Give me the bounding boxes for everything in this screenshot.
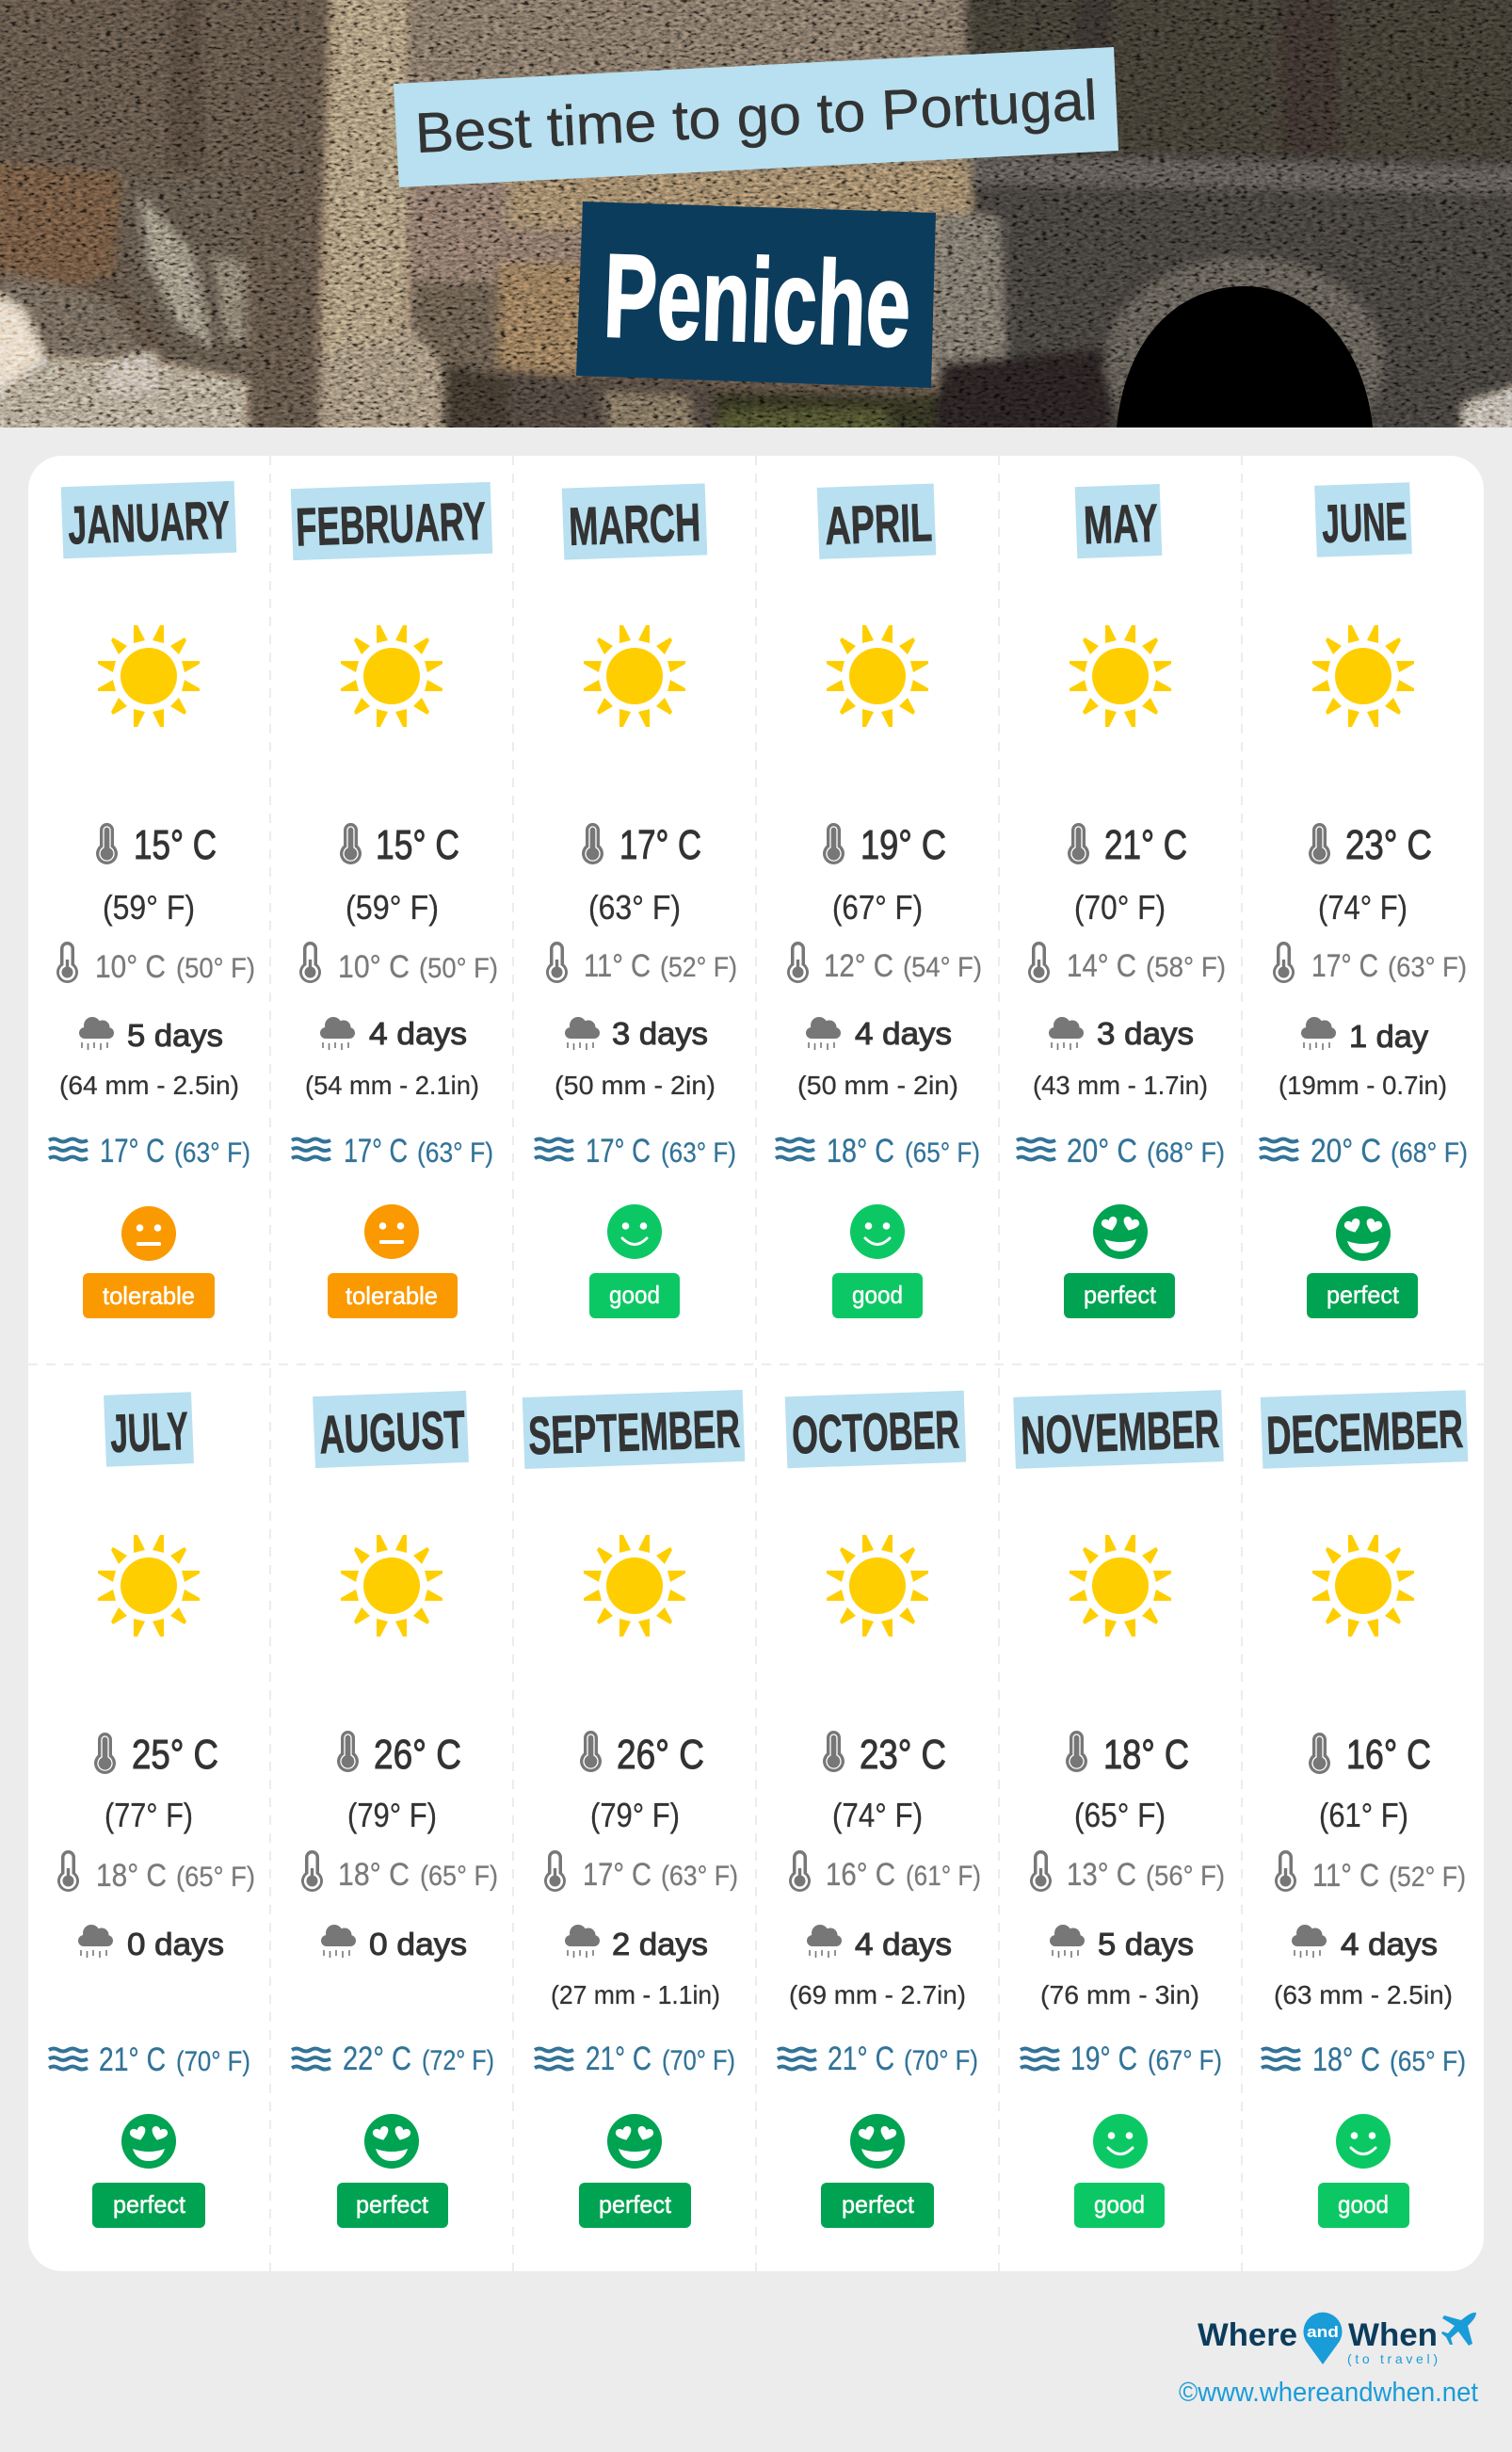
icon: thermometer high <box>580 1731 602 1772</box>
low temperature F: (50° F) <box>176 953 255 984</box>
icon: heart-eyes face <box>607 2114 662 2169</box>
icon: thermometer high <box>96 823 118 864</box>
icon: sea waves <box>1021 2049 1059 2070</box>
month label: MARCH <box>568 492 701 557</box>
sea temperature C: 21° C <box>99 2041 166 2078</box>
month label <box>291 482 492 560</box>
icon: smiling face <box>1093 2114 1148 2169</box>
sea temperature F: (72° F) <box>422 2045 494 2076</box>
rainfall: (27 mm - 1.1in) <box>551 1980 720 2009</box>
rainy days: 5 days <box>1098 1927 1194 1961</box>
icon: sea waves <box>535 1139 573 1160</box>
rainy days: 3 days <box>1097 1016 1194 1051</box>
month label <box>562 483 707 560</box>
rating badge <box>579 2183 691 2228</box>
rainy days: 1 day <box>1349 1019 1429 1054</box>
rating badge: perfect <box>1327 1281 1400 1309</box>
low temperature C: 18° C <box>96 1858 167 1894</box>
icon: thermometer high <box>1066 1731 1087 1772</box>
icon: map pin with and <box>1303 2313 1343 2364</box>
high temperature F: (65° F) <box>1074 1796 1166 1834</box>
column: June <box>1260 482 1468 1318</box>
month label: MAY <box>1083 493 1159 556</box>
month label: JUNE <box>1321 492 1407 555</box>
low temperature C: 18° C <box>338 1857 410 1893</box>
sea temperature F: (65° F) <box>1390 2046 1466 2077</box>
low temperature F: (52° F) <box>1389 1862 1466 1893</box>
icon: sea waves <box>1017 1139 1055 1160</box>
sea temperature F: (70° F) <box>662 2045 735 2076</box>
icon: heart-eyes face <box>364 2114 419 2169</box>
month label: FEBRUARY <box>295 492 487 558</box>
rainfall: (63 mm - 2.5in) <box>1274 1980 1453 2009</box>
sea temperature F: (70° F) <box>904 2045 978 2076</box>
icon: airplane <box>1441 2313 1476 2346</box>
icon: thermometer high <box>823 1731 844 1772</box>
rating badge: tolerable <box>346 1282 438 1310</box>
icon: map pin with and: and <box>1307 2323 1339 2341</box>
low temperature F: (52° F) <box>660 952 737 983</box>
month label: JULY <box>109 1401 189 1464</box>
high temperature F: (67° F) <box>832 888 923 927</box>
rainy days: 0 days <box>369 1927 467 1961</box>
icon: sun <box>584 1535 685 1637</box>
icon: sun <box>341 625 442 727</box>
icon: sea waves <box>292 2049 330 2070</box>
high temperature C: 17° C <box>619 822 701 868</box>
icon: thermometer high <box>1309 823 1330 864</box>
rating badge <box>328 1273 458 1318</box>
month label <box>1075 484 1162 558</box>
sea temperature F: (63° F) <box>661 1137 736 1169</box>
icon: thermometer low <box>301 1850 323 1892</box>
low temperature C: 13° C <box>1067 1857 1136 1893</box>
month label: AUGUST <box>318 1399 466 1465</box>
low temperature C: 11° C <box>584 948 651 984</box>
icon: rain cloud <box>1050 1925 1085 1958</box>
low temperature C: 17° C <box>583 1857 651 1893</box>
icon: thermometer low <box>56 942 78 983</box>
rainy days: 4 days <box>1341 1927 1438 1961</box>
sea temperature C: 20° C <box>1067 1133 1137 1170</box>
low temperature C: 16° C <box>826 1857 895 1893</box>
icon: thermometer low <box>787 942 809 983</box>
icon: sun <box>827 625 928 727</box>
icon: thermometer low <box>1028 942 1050 983</box>
month label <box>61 481 236 558</box>
high temperature C: 21° C <box>1104 822 1187 868</box>
low temperature F: (54° F) <box>903 952 982 983</box>
rating badge <box>1074 2183 1165 2228</box>
logo: Where and When to travel <box>1198 2313 1476 2366</box>
low temperature F: (63° F) <box>661 1861 738 1892</box>
rating badge: good <box>609 1281 660 1309</box>
sea temperature C: 17° C <box>100 1133 165 1170</box>
rainfall: (69 mm - 2.7in) <box>789 1980 966 2009</box>
icon: rain cloud <box>79 1017 114 1050</box>
icon: smiling face <box>607 1204 662 1259</box>
icon: sun <box>98 1535 200 1637</box>
icon: neutral face <box>364 1204 419 1259</box>
icon: rain cloud <box>320 1017 355 1050</box>
icon: thermometer low <box>1273 942 1295 983</box>
icon: rain cloud <box>806 1017 841 1050</box>
rating badge <box>832 1273 923 1318</box>
low temperature F: (65° F) <box>420 1861 498 1892</box>
icon: neutral face <box>121 1206 176 1261</box>
high temperature F: (70° F) <box>1074 888 1166 927</box>
icon: sun <box>1070 625 1171 727</box>
sea temperature F: (65° F) <box>905 1137 980 1169</box>
icon: thermometer low <box>789 1850 811 1892</box>
high temperature C: 26° C <box>617 1732 704 1778</box>
column: July <box>49 1392 255 2228</box>
rainy days: 5 days <box>127 1018 223 1053</box>
low temperature F: (56° F) <box>1146 1861 1225 1892</box>
high temperature F: (79° F) <box>590 1796 680 1834</box>
month label: APRIL <box>824 492 933 557</box>
sea temperature C: 19° C <box>1070 2041 1137 2077</box>
logo tagline: (to travel) <box>1347 2351 1438 2366</box>
icon: thermometer low <box>544 1850 566 1892</box>
rating badge: good <box>1094 2190 1145 2218</box>
rating badge <box>92 2183 205 2228</box>
icon: thermometer low <box>546 942 568 983</box>
rating badge: perfect <box>113 2190 186 2218</box>
rating badge: tolerable <box>103 1282 195 1310</box>
rainfall: (19mm - 0.7in) <box>1279 1071 1447 1100</box>
sea temperature C: 17° C <box>344 1133 408 1170</box>
icon: thermometer low <box>57 1850 79 1892</box>
rainfall: (76 mm - 3in) <box>1040 1980 1199 2009</box>
icon: rain cloud <box>78 1925 113 1958</box>
icon: rain cloud <box>565 1017 600 1050</box>
rating badge: perfect <box>599 2190 672 2218</box>
high temperature C: 23° C <box>1345 822 1432 868</box>
icon: thermometer high <box>582 823 603 864</box>
title banner: Peniche: Peniche <box>602 229 913 372</box>
sea temperature C: 17° C <box>586 1133 651 1170</box>
icon: sun <box>98 625 200 727</box>
rating badge: perfect <box>356 2190 429 2218</box>
icon: rain cloud <box>807 1925 842 1958</box>
icon: thermometer high <box>340 823 362 864</box>
icon: sun <box>1312 625 1414 727</box>
high temperature F: (74° F) <box>832 1796 923 1834</box>
low temperature C: 10° C <box>338 949 410 985</box>
title banner: Best time to go to Portugal: Best time to go to Portugal <box>413 69 1099 165</box>
high temperature C: 18° C <box>1103 1732 1189 1778</box>
high temperature C: 19° C <box>861 822 946 868</box>
icon: thermometer low <box>299 942 321 983</box>
low temperature F: (50° F) <box>419 953 498 984</box>
icon: thermometer high <box>337 1731 359 1772</box>
sea temperature C: 22° C <box>343 2041 411 2077</box>
high temperature C: 26° C <box>374 1732 461 1778</box>
icon: smiling face <box>850 1204 905 1259</box>
icon: rain cloud <box>1292 1925 1327 1958</box>
rating badge <box>83 1273 215 1318</box>
sea temperature F: (63° F) <box>174 1137 250 1169</box>
sea temperature F: (68° F) <box>1147 1137 1225 1169</box>
title banner: Best time to go to Portugal <box>394 47 1118 187</box>
icon: sea waves <box>778 2049 816 2070</box>
rating badge <box>337 2183 448 2228</box>
low temperature F: (63° F) <box>1388 952 1467 983</box>
icon: rain cloud <box>1301 1017 1336 1050</box>
icon: heart-eyes face <box>1093 1204 1148 1259</box>
panel: monthly climate card <box>28 456 1484 2271</box>
rainfall: (43 mm - 1.7in) <box>1033 1071 1208 1100</box>
sea temperature F: (63° F) <box>417 1137 493 1169</box>
title banner: Peniche <box>576 202 936 388</box>
high temperature C: 15° C <box>134 822 217 868</box>
icon: sea waves <box>776 1139 814 1160</box>
icon: sea waves <box>49 2049 88 2070</box>
column: February <box>291 482 498 1318</box>
icon: sea waves <box>49 1139 88 1160</box>
website credit: ©www.whereandwhen.net <box>1179 2378 1478 2408</box>
low temperature C: 14° C <box>1067 948 1136 984</box>
icon: thermometer high <box>94 1733 116 1774</box>
icon: thermometer high <box>1068 823 1089 864</box>
low temperature C: 10° C <box>95 949 166 985</box>
month label <box>313 1391 469 1468</box>
rating badge <box>821 2183 934 2228</box>
high temperature F: (61° F) <box>1319 1796 1408 1834</box>
icon: thermometer low <box>1030 1850 1052 1892</box>
high temperature F: (77° F) <box>105 1796 193 1834</box>
rainy days: 0 days <box>127 1927 224 1961</box>
month label <box>817 484 936 559</box>
sea temperature C: 21° C <box>586 2041 651 2077</box>
month label <box>1314 482 1412 557</box>
low temperature C: 12° C <box>824 948 893 984</box>
low temperature C: 17° C <box>1311 948 1378 984</box>
low temperature C: 11° C <box>1312 1858 1379 1894</box>
month label: SEPTEMBER <box>527 1399 741 1466</box>
icon: rain cloud <box>321 1925 356 1958</box>
rainfall: (54 mm - 2.1in) <box>305 1071 479 1100</box>
low temperature F: (65° F) <box>176 1862 255 1893</box>
icon: heart-eyes face <box>850 2114 905 2169</box>
rainy days: 4 days <box>369 1016 467 1051</box>
icon: sun <box>1312 1535 1414 1637</box>
column: October <box>778 1391 981 2228</box>
logo word: Where: Where <box>1198 2317 1297 2353</box>
icon: heart-eyes face <box>121 2114 176 2169</box>
high temperature F: (79° F) <box>347 1796 437 1834</box>
sea temperature F: (70° F) <box>176 2046 250 2077</box>
column: November <box>1013 1390 1225 2228</box>
rating badge <box>1307 1273 1418 1318</box>
rainfall: (50 mm - 2in) <box>797 1071 958 1100</box>
column: December <box>1261 1390 1468 2228</box>
column: September <box>523 1390 745 2228</box>
month label: JANUARY <box>67 491 231 556</box>
high temperature F: (63° F) <box>588 888 681 927</box>
month label: NOVEMBER <box>1020 1399 1220 1466</box>
month label <box>104 1392 194 1467</box>
rainy days: 2 days <box>612 1927 708 1961</box>
header photo: stone fortress wall <box>0 0 1512 468</box>
rating badge <box>589 1273 680 1318</box>
column: May <box>1017 484 1226 1318</box>
column: August <box>292 1391 498 2228</box>
rating badge: good <box>1338 2190 1389 2218</box>
month label: OCTOBER <box>791 1399 960 1466</box>
icon: sea waves <box>292 1139 330 1160</box>
high temperature C: 16° C <box>1346 1732 1431 1778</box>
rating badge: perfect <box>842 2190 915 2218</box>
icon: rain cloud <box>1049 1017 1084 1050</box>
rainfall: (50 mm - 2in) <box>555 1071 716 1100</box>
icon: sea waves <box>1260 1139 1298 1160</box>
sea temperature C: 18° C <box>1312 2041 1380 2078</box>
sea temperature F: (67° F) <box>1148 2045 1222 2076</box>
rating badge <box>1064 1273 1175 1318</box>
high temperature F: (59° F) <box>346 888 439 927</box>
high temperature F: (74° F) <box>1318 888 1407 927</box>
rainfall: (64 mm - 2.5in) <box>59 1071 239 1100</box>
rating badge: perfect <box>1084 1281 1157 1309</box>
icon: sea waves <box>535 2049 573 2070</box>
icon: sun <box>827 1535 928 1637</box>
icon: thermometer high <box>1309 1733 1330 1774</box>
icon: sun <box>584 625 685 727</box>
rating badge: good <box>852 1281 903 1309</box>
icon: smiling face <box>1336 2114 1391 2169</box>
high temperature F: (59° F) <box>103 888 195 927</box>
rainy days: 3 days <box>612 1016 708 1051</box>
sea temperature C: 21° C <box>828 2041 894 2077</box>
icon: heart-eyes face <box>1336 1206 1391 1261</box>
sea temperature C: 20° C <box>1311 1133 1381 1170</box>
high temperature C: 15° C <box>376 822 459 868</box>
high temperature C: 25° C <box>132 1732 218 1778</box>
month label <box>523 1390 745 1469</box>
month label <box>1013 1390 1224 1469</box>
column: March <box>535 483 737 1318</box>
rainy days: 4 days <box>855 1927 952 1961</box>
rainy days: 4 days <box>855 1016 952 1051</box>
sea temperature C: 18° C <box>827 1133 894 1170</box>
sea temperature F: (68° F) <box>1391 1137 1468 1169</box>
icon: sea waves <box>1262 2049 1300 2070</box>
icon: sun <box>341 1535 442 1637</box>
month label <box>785 1391 966 1468</box>
low temperature F: (58° F) <box>1146 952 1226 983</box>
rating badge <box>1318 2183 1409 2228</box>
icon: sun <box>1070 1535 1171 1637</box>
high temperature C: 23° C <box>860 1732 946 1778</box>
icon: thermometer low <box>1275 1850 1296 1892</box>
low temperature F: (61° F) <box>906 1861 981 1892</box>
icon: thermometer high <box>823 823 844 864</box>
icon: rain cloud <box>565 1925 600 1958</box>
column: April <box>776 484 982 1318</box>
column: January <box>49 481 255 1318</box>
logo word: When: When <box>1348 2317 1438 2353</box>
